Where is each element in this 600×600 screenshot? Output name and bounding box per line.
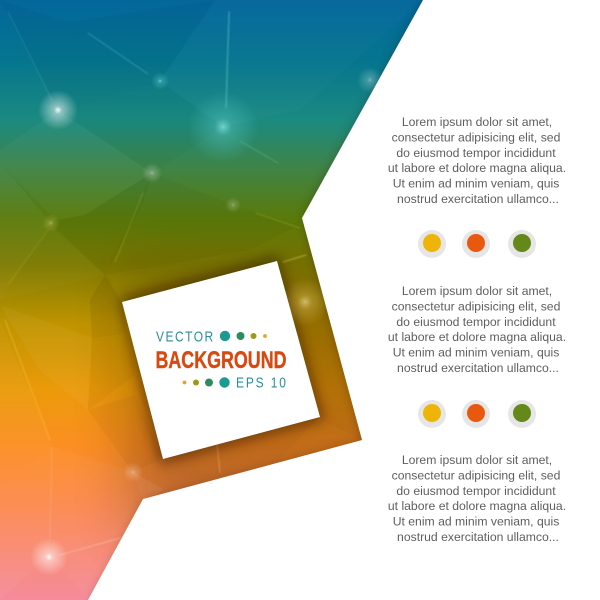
glow: centre star	[144, 164, 160, 182]
glow: cyan star	[194, 100, 252, 158]
text block 1: nostrud exercitation ullamco...	[397, 192, 559, 206]
text block 3: nostrud exercitation ullamco...	[397, 530, 559, 544]
shadow of the white page edge	[87, 0, 423, 600]
glow: upper-left star	[39, 91, 77, 128]
text block 3: Lorem ipsum dolor sit amet,	[402, 453, 552, 467]
title: VECTOR: VECTOR	[156, 328, 215, 345]
text block 3	[388, 453, 566, 544]
color dots row 2	[418, 400, 536, 428]
glow: bottom pink star	[32, 540, 66, 574]
text block 2: Ut enim ad minim veniam, quis	[393, 346, 559, 360]
glow: top-right star	[358, 68, 380, 92]
panel: white title card	[122, 261, 320, 459]
color dots row 1	[418, 230, 536, 258]
text block 3: Ut enim ad minim veniam, quis	[393, 514, 559, 528]
dots: top row	[220, 331, 267, 341]
glow: top small star	[153, 74, 167, 88]
text block 1: Ut enim ad minim veniam, quis	[393, 176, 559, 190]
low-poly facets	[0, 178, 164, 498]
soft darkening behind the title card	[130, 275, 430, 535]
glow: lower orange star	[124, 464, 142, 480]
text block 3: do eiusmod tempor incididunt	[396, 484, 556, 498]
text block 1: do eiusmod tempor incididunt	[396, 146, 556, 160]
text block 1: ut labore et dolore magna aliqua.	[388, 161, 566, 175]
glow: small green star	[226, 198, 240, 212]
text block 3: consectetur adipisicing elit, sed	[392, 468, 560, 482]
title: EPS 10: EPS 10	[236, 374, 288, 391]
glow: left olive star	[44, 216, 58, 230]
shadow of the white square	[120, 256, 324, 464]
text block 3: ut labore et dolore magna aliqua.	[388, 499, 566, 513]
text block 1	[388, 115, 566, 206]
text block 1: Lorem ipsum dolor sit amet,	[402, 115, 552, 129]
text block 2: ut labore et dolore magna aliqua.	[388, 330, 566, 344]
dots: bottom row	[183, 377, 230, 388]
text block 2: consectetur adipisicing elit, sed	[392, 300, 560, 314]
text block 2: Lorem ipsum dolor sit amet,	[402, 284, 552, 298]
glow: frame star	[286, 282, 325, 322]
light streaks	[5, 12, 306, 555]
text block 1: consectetur adipisicing elit, sed	[392, 130, 560, 144]
text block 2	[388, 284, 566, 375]
text block 2: do eiusmod tempor incididunt	[396, 315, 556, 329]
text block 2: nostrud exercitation ullamco...	[397, 361, 559, 375]
title: BACKGROUND: BACKGROUND	[156, 347, 286, 374]
